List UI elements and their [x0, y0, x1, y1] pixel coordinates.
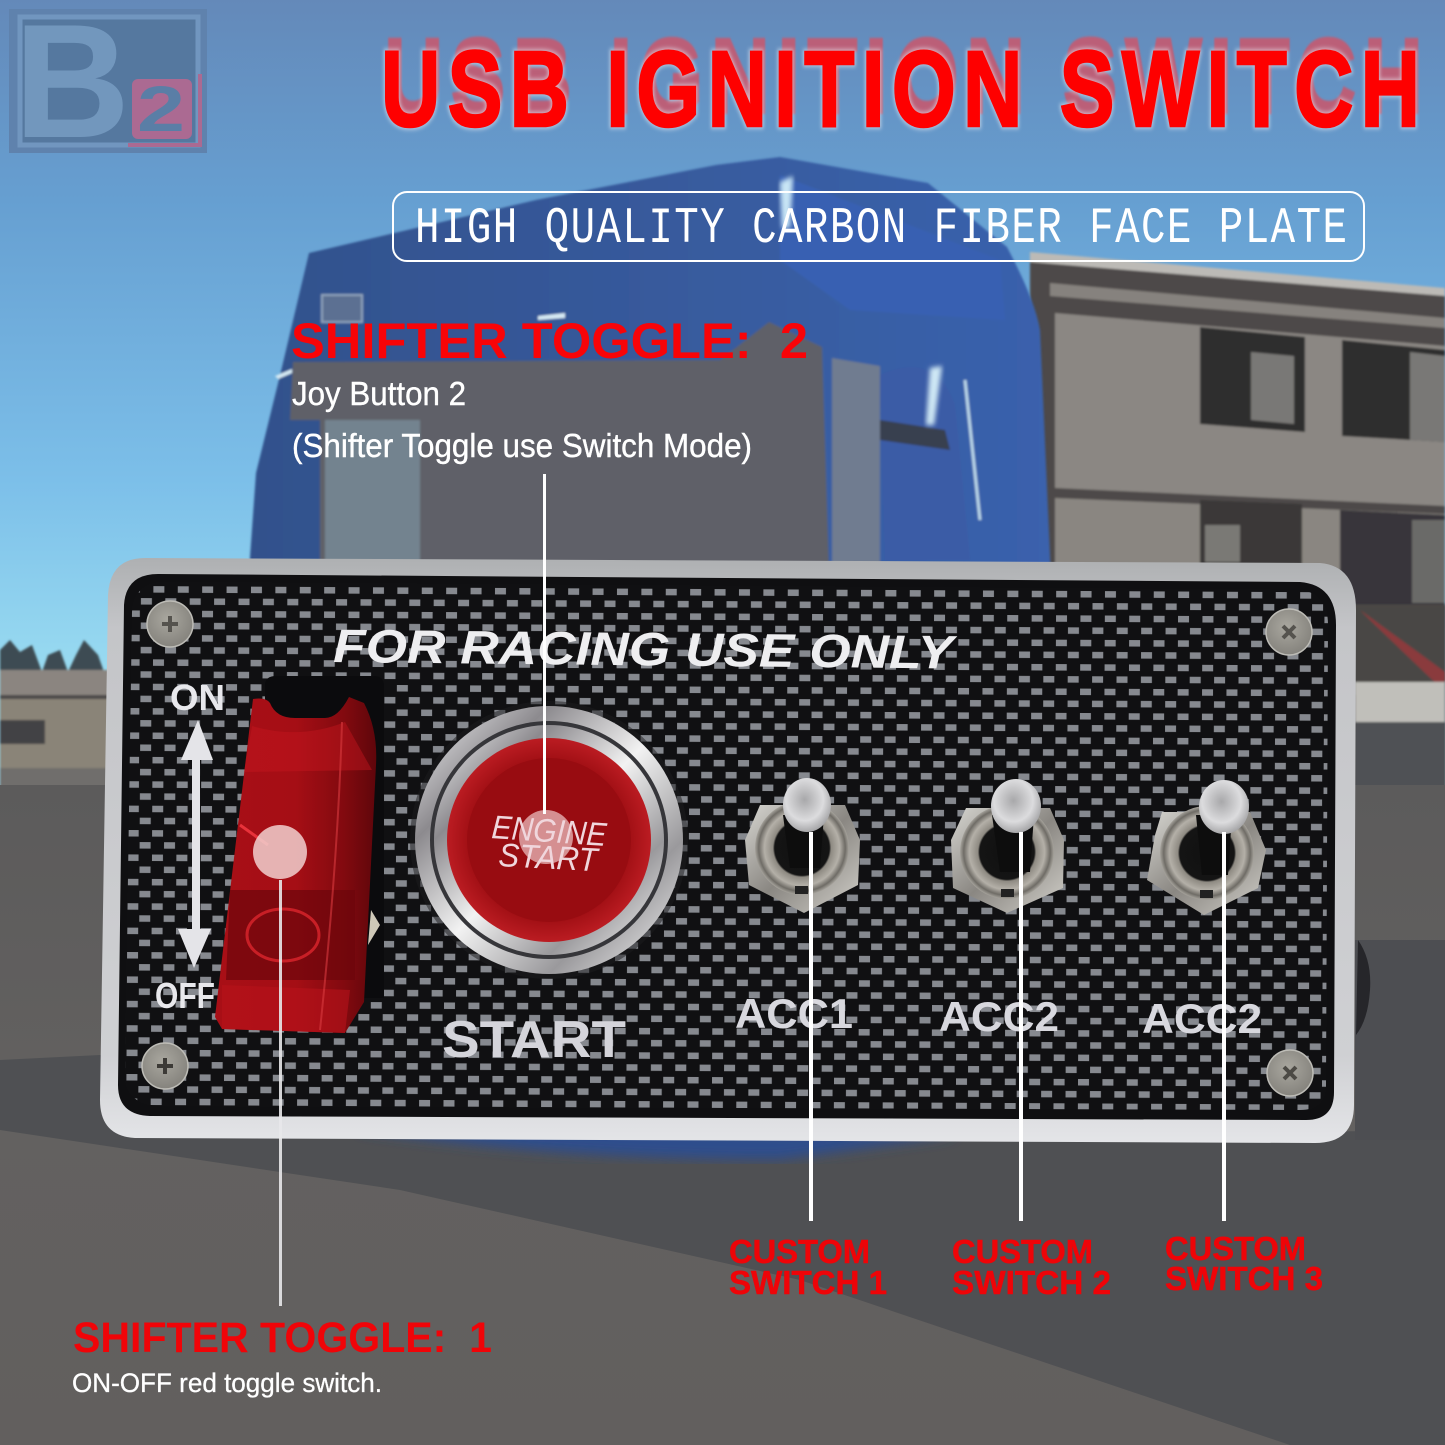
label: shifter toggle 2: (Shifter Toggle use Switch Mode) — [292, 427, 752, 464]
logo: B2 watermark: 2 — [137, 73, 185, 145]
label: shifter toggle 1: ON-OFF red toggle switch. — [72, 1368, 382, 1398]
label: shifter toggle 1: SHIFTER TOGGLE: 1 — [73, 1314, 492, 1362]
label: shifter toggle 2: SHIFTER TOGGLE: 2 — [291, 313, 808, 369]
label: custom switch 2: SWITCH 2 — [952, 1264, 1111, 1301]
toggle switch 1 — [745, 778, 860, 913]
title: USB IGNITION SWITCH — [384, 16, 1423, 137]
plate text: ACC1 — [735, 990, 853, 1037]
red safety toggle switch — [215, 676, 384, 1033]
label: custom switch 3 — [1165, 1230, 1323, 1297]
title: USB IGNITION SWITCH — [381, 29, 1420, 150]
side knob — [1356, 940, 1370, 1035]
label: custom switch 3: CUSTOM — [1165, 1230, 1306, 1267]
panel: carbon fiber switch plate — [100, 558, 1356, 1143]
plate text: START — [442, 1011, 626, 1069]
building — [1030, 252, 1445, 800]
label: custom switch 2: CUSTOM — [952, 1233, 1093, 1270]
plate text: ACC2 — [1142, 995, 1262, 1042]
label: shifter toggle 1 — [72, 1314, 492, 1398]
label: custom switch 3: SWITCH 3 — [1165, 1260, 1323, 1297]
engine start button — [410, 701, 688, 979]
icon: screws — [142, 601, 1313, 1096]
label: shifter toggle 2: Joy Button 2 — [292, 375, 466, 412]
engine start button: START — [498, 836, 601, 878]
plate text — [155, 619, 1262, 1069]
label: shifter toggle 2 — [291, 313, 808, 464]
label: custom switch 1: CUSTOM — [729, 1233, 870, 1270]
ground — [0, 785, 1445, 1445]
plate text: ON — [170, 677, 225, 718]
toggle switch 2 — [951, 779, 1064, 913]
subtitle badge: HIGH QUALITY CARBON FIBER FACE PLATE — [415, 200, 1347, 257]
plate text: FOR RACING USE ONLY — [333, 619, 958, 679]
callout lines and markers — [253, 474, 1226, 1306]
label: custom switch 2 — [952, 1233, 1111, 1301]
plate text: ACC2 — [939, 993, 1059, 1040]
title: USB IGNITION SWITCH — [381, 29, 1420, 150]
toggle switch 3 — [1147, 780, 1266, 915]
truck cab — [250, 157, 1052, 600]
plate text: OFF — [155, 975, 215, 1016]
logo: B2 watermark — [9, 0, 207, 172]
engine start button: ENGINE — [491, 808, 609, 853]
label: custom switch 1: SWITCH 1 — [729, 1264, 887, 1301]
icon: on-off arrow — [178, 720, 213, 968]
distant scenery — [0, 605, 1445, 945]
label: custom switch 1 — [729, 1233, 887, 1301]
